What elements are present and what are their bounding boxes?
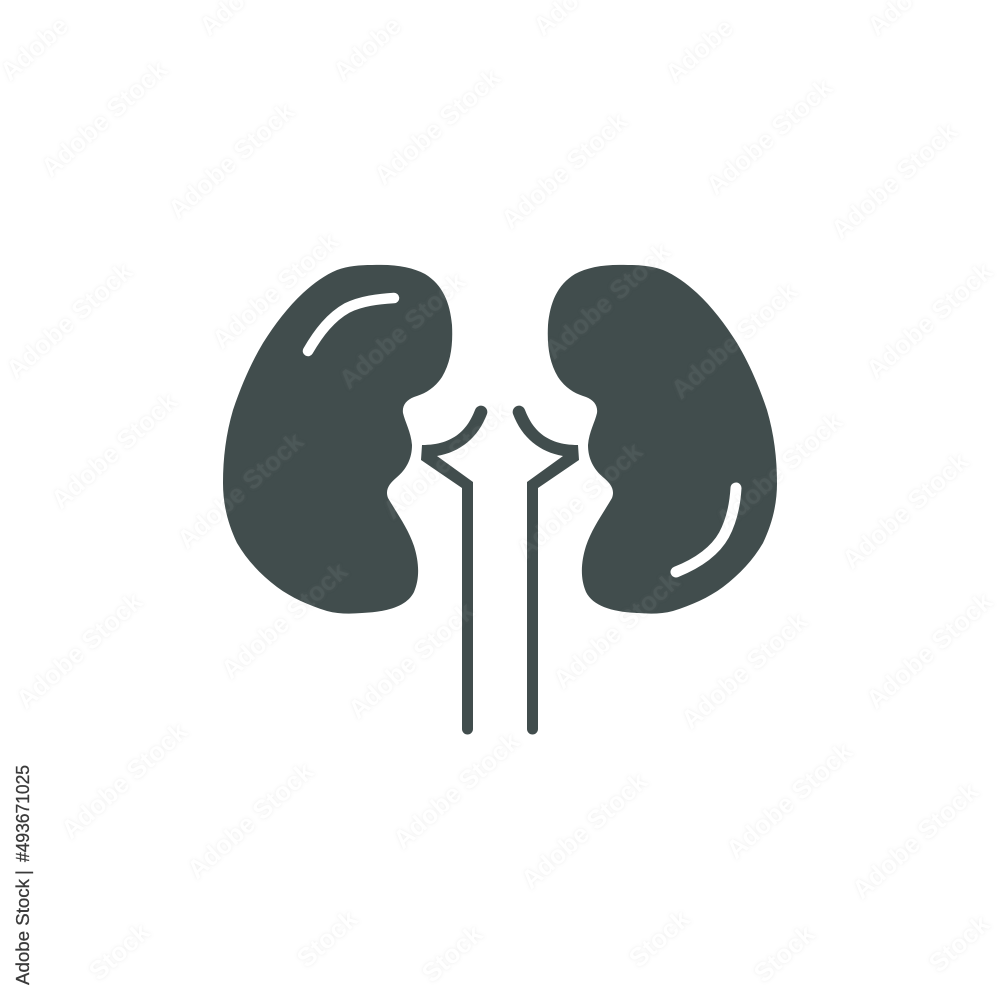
watermark: repeated Adobe Stock text: Stock [748,918,821,988]
watermark: repeated Adobe Stock text: Adobe Stock [710,406,848,535]
icon: kidneys and ureters [223,265,777,734]
right kidney [548,265,777,614]
side credit text [13,765,33,985]
watermark: repeated Adobe Stock text: Adobe Stock [547,566,685,695]
right ureter [513,406,579,734]
watermark: repeated Adobe Stock text: Adobe Stock [538,236,676,365]
watermark: repeated Adobe Stock text: Adobe Stock [720,736,858,865]
watermark: repeated Adobe Stock text: Stock [923,908,996,978]
watermark: repeated Adobe Stock text: Adobe Stock [515,766,653,895]
watermark: repeated Adobe Stock text: Adobe Stock [675,606,813,735]
right kidney highlight [676,488,736,572]
side credit text: #493671025 [13,765,33,862]
watermark: repeated Adobe Stock text: Adobe Stock [333,266,471,395]
watermark: repeated Adobe Stock text: Adobe Stock [368,62,506,191]
watermark: repeated Adobe Stock text: Adobe Stock [700,72,838,201]
watermark: repeated Adobe Stock text: Adobe Stock [45,386,183,515]
watermark: repeated Adobe Stock text: Adobe Stock [181,756,319,885]
watermark: repeated Adobe Stock text: Adobe [659,12,739,89]
side credit text: Adobe Stock [13,878,33,985]
watermark: repeated Adobe Stock text: Adobe Stock [825,116,963,245]
watermark: repeated Adobe Stock text: Adobe Stock [0,256,138,385]
watermark: repeated Adobe Stock text: Adobe Stock [10,586,148,715]
watermark: repeated Adobe Stock text: Adobe Stock [846,776,984,905]
watermark: repeated Adobe Stock text: Adobe Stock [495,106,633,235]
watermark: repeated Adobe Stock text: Adobe Stock [665,276,803,405]
watermark: repeated Adobe Stock text: Stock [623,903,696,973]
left kidney highlight [308,298,394,351]
watermark: repeated Adobe Stock text: Adobe Stock [860,586,998,715]
watermark: repeated Adobe Stock text: Adobe [327,10,407,87]
watermark: repeated Adobe Stock text: Stock [291,903,364,973]
watermark: repeated Adobe Stock text: Adobe Stock [377,396,515,525]
watermark: repeated Adobe Stock text: Adobe Stock [55,716,193,845]
watermark: repeated Adobe Stock text: Adobe Stock [35,54,173,183]
watermark: repeated Adobe Stock text: Adobe Stock [162,96,300,225]
watermark: repeated Adobe Stock text: Adobe Stock [171,426,309,555]
watermark: repeated Adobe Stock text: Adobe Stock [510,436,648,565]
watermark: repeated Adobe Stock text: Stock [416,918,489,988]
watermark: repeated Adobe Stock text: Adobe Stock [860,256,998,385]
watermark: repeated Adobe Stock text: Adobe Stock [215,556,353,685]
watermark: repeated Adobe Stock text: Stock [83,916,156,986]
watermark: repeated Adobe Stock text: Adobe Stock [387,726,525,855]
left ureter [421,406,487,734]
watermark: repeated Adobe Stock text: Adobe Stock [836,446,974,575]
left kidney [223,265,452,614]
watermark: repeated Adobe Stock text: Adobe Stock [342,596,480,725]
watermark: repeated Adobe Stock text: Adobe Stock [206,226,344,355]
side credit text: | [13,870,33,875]
